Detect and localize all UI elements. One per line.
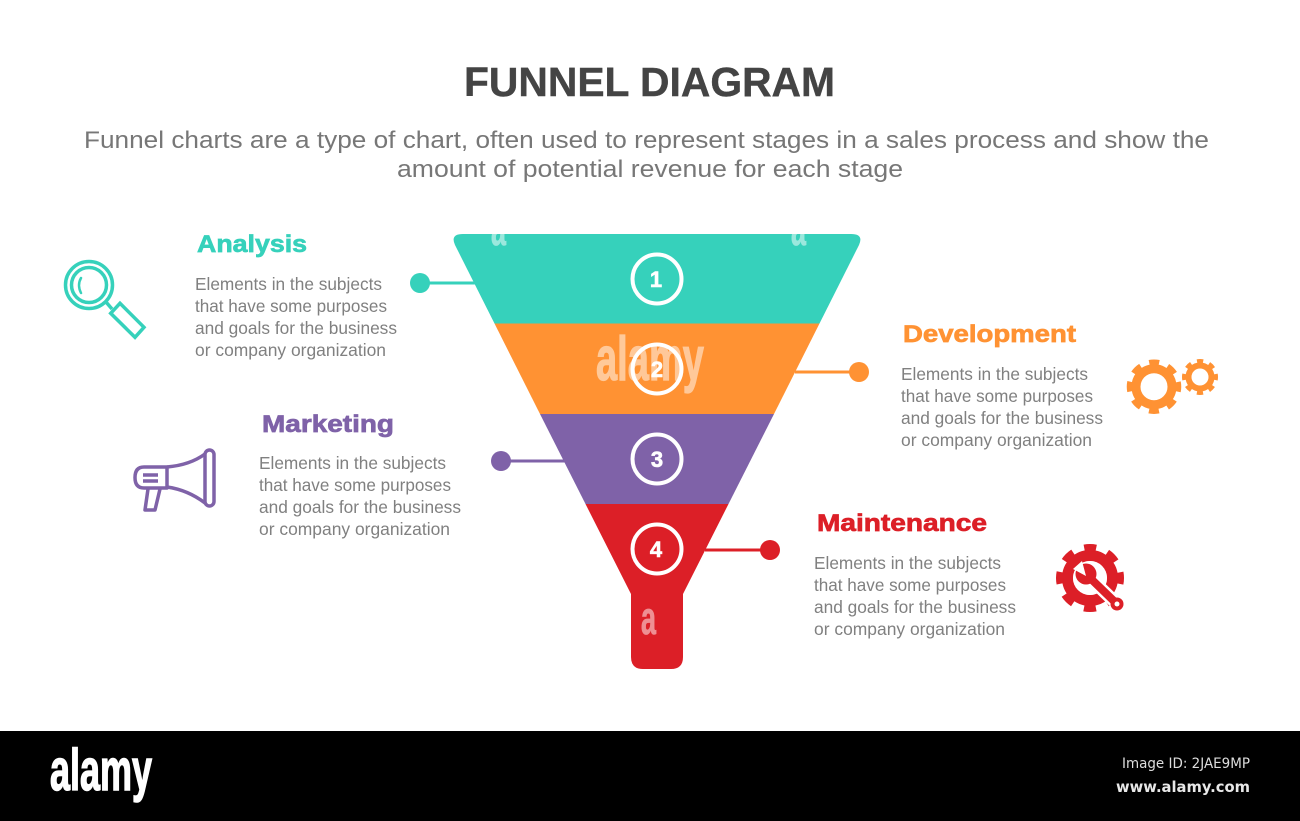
text block: marketing <box>259 453 461 539</box>
number badge 2: 2 <box>651 357 663 382</box>
text block: maintenance: or company organization <box>814 619 1005 639</box>
text block: analysis: and goals for the business <box>195 318 397 338</box>
text block: development: Elements in the subjects <box>901 364 1088 384</box>
icon: magnifying glass <box>66 262 144 337</box>
heading: marketing: Marketing <box>262 411 394 438</box>
subtitle <box>84 127 1209 183</box>
footer logo: alamy <box>50 738 152 803</box>
title: FUNNEL DIAGRAM <box>464 59 835 105</box>
website: www.alamy.com <box>1116 778 1250 796</box>
footer bar <box>0 731 1300 821</box>
connector: maintenance <box>705 540 780 560</box>
text block: marketing: that have some purposes <box>259 475 451 495</box>
icon: wrench gear <box>1060 548 1124 610</box>
text block: development: that have some purposes <box>901 386 1093 406</box>
watermark on funnel: a <box>491 203 506 255</box>
number badge 4: 4 <box>650 537 663 562</box>
funnel segment 3 <box>540 414 774 504</box>
number badge 3 <box>632 434 682 484</box>
watermark on funnel: a <box>791 203 806 255</box>
icon: gears <box>1130 362 1216 411</box>
number badge 2 <box>632 344 682 394</box>
heading: analysis: Analysis <box>197 231 307 258</box>
funnel segment 4 and stem <box>586 504 728 669</box>
image id: Image ID: 2JAE9MP <box>1122 756 1250 772</box>
subtitle: Funnel charts are a type of chart, often used to represent stages in a sales process and show the <box>84 127 1209 154</box>
text block: marketing: or company organization <box>259 519 450 539</box>
number badge 1: 1 <box>650 267 662 292</box>
watermark on funnel: alamy <box>596 325 704 394</box>
heading: maintenance: Maintenance <box>817 510 987 537</box>
text block: marketing: Elements in the subjects <box>259 453 446 473</box>
text block: analysis <box>195 274 397 360</box>
text block: maintenance: and goals for the business <box>814 597 1016 617</box>
watermark on funnel: a <box>641 592 656 644</box>
text block: analysis: or company organization <box>195 340 386 360</box>
number badge 3: 3 <box>651 447 663 472</box>
text block: maintenance: Elements in the subjects <box>814 553 1001 573</box>
text block: marketing: and goals for the business <box>259 497 461 517</box>
text block: development: and goals for the business <box>901 408 1103 428</box>
subtitle: amount of potential revenue for each stage <box>397 156 903 183</box>
panel: development <box>901 321 1103 450</box>
funnel chart <box>454 203 860 669</box>
text block: analysis: Elements in the subjects <box>195 274 382 294</box>
text block: development <box>901 364 1103 450</box>
funnel segment 1 <box>454 234 860 324</box>
connector: marketing <box>491 451 565 471</box>
text block: maintenance: that have some purposes <box>814 575 1006 595</box>
text block: analysis: that have some purposes <box>195 296 387 316</box>
watermark on funnel <box>491 203 806 644</box>
funnel segment 2 <box>494 324 820 414</box>
text block: maintenance <box>814 553 1016 639</box>
number badge 4 <box>632 524 682 574</box>
icon: megaphone <box>135 450 214 510</box>
connector: analysis <box>410 273 475 293</box>
panel: maintenance <box>814 510 1016 639</box>
connector: development <box>795 362 869 382</box>
heading: development: Development <box>903 321 1076 348</box>
panel: analysis <box>195 231 397 360</box>
text block: development: or company organization <box>901 430 1092 450</box>
panel: marketing <box>259 411 461 539</box>
number badge 1 <box>632 254 682 304</box>
